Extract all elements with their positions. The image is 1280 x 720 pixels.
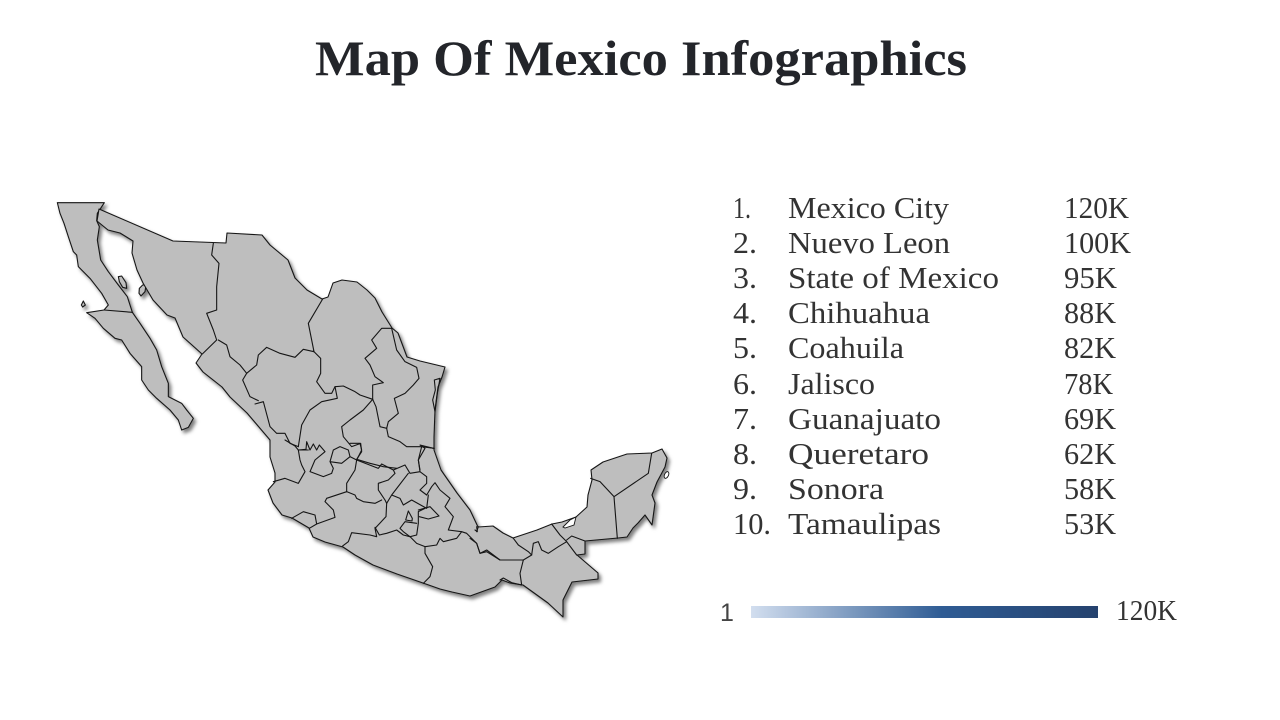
- row 2: Nuevo Leon: [788, 225, 951, 260]
- row 3: 95K: [1064, 260, 1118, 295]
- legend minimum label: 1: [720, 599, 734, 627]
- row 1: 1.: [733, 190, 751, 225]
- row 5: Coahuila: [788, 330, 904, 365]
- state borders: north: [104, 243, 323, 401]
- silhouette: landmass: [57, 203, 667, 617]
- row 1: 120K: [1064, 190, 1130, 225]
- row 3: State of Mexico: [788, 260, 999, 295]
- row 2: 2.: [733, 225, 757, 260]
- row 9: [733, 471, 1117, 506]
- row 1: Mexico City: [788, 190, 950, 225]
- row 8: 62K: [1064, 436, 1117, 471]
- mainland: [97, 209, 667, 617]
- row 2: 100K: [1064, 225, 1132, 260]
- legend gradient bar: [751, 606, 1098, 618]
- row 7: 69K: [1064, 401, 1117, 436]
- row 10: 53K: [1064, 506, 1117, 541]
- row 8: Queretaro: [788, 436, 929, 471]
- row 4: Chihuahua: [788, 295, 930, 330]
- row 6: Jalisco: [788, 366, 875, 401]
- row 6: [733, 366, 1114, 401]
- row 5: 5.: [733, 330, 757, 365]
- row 10: Tamaulipas: [788, 506, 941, 541]
- row 8: [733, 436, 1117, 471]
- Baja California peninsula: [57, 203, 193, 430]
- icon: Cozumel island: [663, 471, 670, 479]
- state borders: centre: [273, 440, 510, 583]
- row 10: [733, 506, 1117, 541]
- row 3: 3.: [733, 260, 757, 295]
- state borders: centre-north: [255, 328, 440, 470]
- row 9: Sonora: [788, 471, 884, 506]
- icon: Laguna de Terminos: [563, 517, 576, 528]
- islands: [81, 276, 146, 307]
- map of Mexico: [57, 203, 670, 617]
- row 9: 58K: [1064, 471, 1117, 506]
- row 8: 8.: [733, 436, 757, 471]
- state borders: south-east: [470, 453, 652, 585]
- row 4: [733, 295, 1117, 330]
- row 6: 6.: [733, 366, 757, 401]
- legend: [720, 595, 1177, 627]
- row 1: [733, 190, 1130, 225]
- row 7: [733, 401, 1117, 436]
- row 4: 4.: [733, 295, 757, 330]
- legend maximum label: 120K: [1116, 595, 1177, 627]
- ranking list: [733, 190, 1132, 541]
- row 3: [733, 260, 1118, 295]
- row 4: 88K: [1064, 295, 1117, 330]
- row 5: 82K: [1064, 330, 1117, 365]
- row 6: 78K: [1064, 366, 1114, 401]
- row 5: [733, 330, 1117, 365]
- row 9: 9.: [733, 471, 757, 506]
- row 10: 10.: [733, 506, 771, 541]
- row 7: Guanajuato: [788, 401, 941, 436]
- row 7: 7.: [733, 401, 757, 436]
- row 2: [733, 225, 1132, 260]
- title: Map Of Mexico Infographics: [315, 30, 967, 86]
